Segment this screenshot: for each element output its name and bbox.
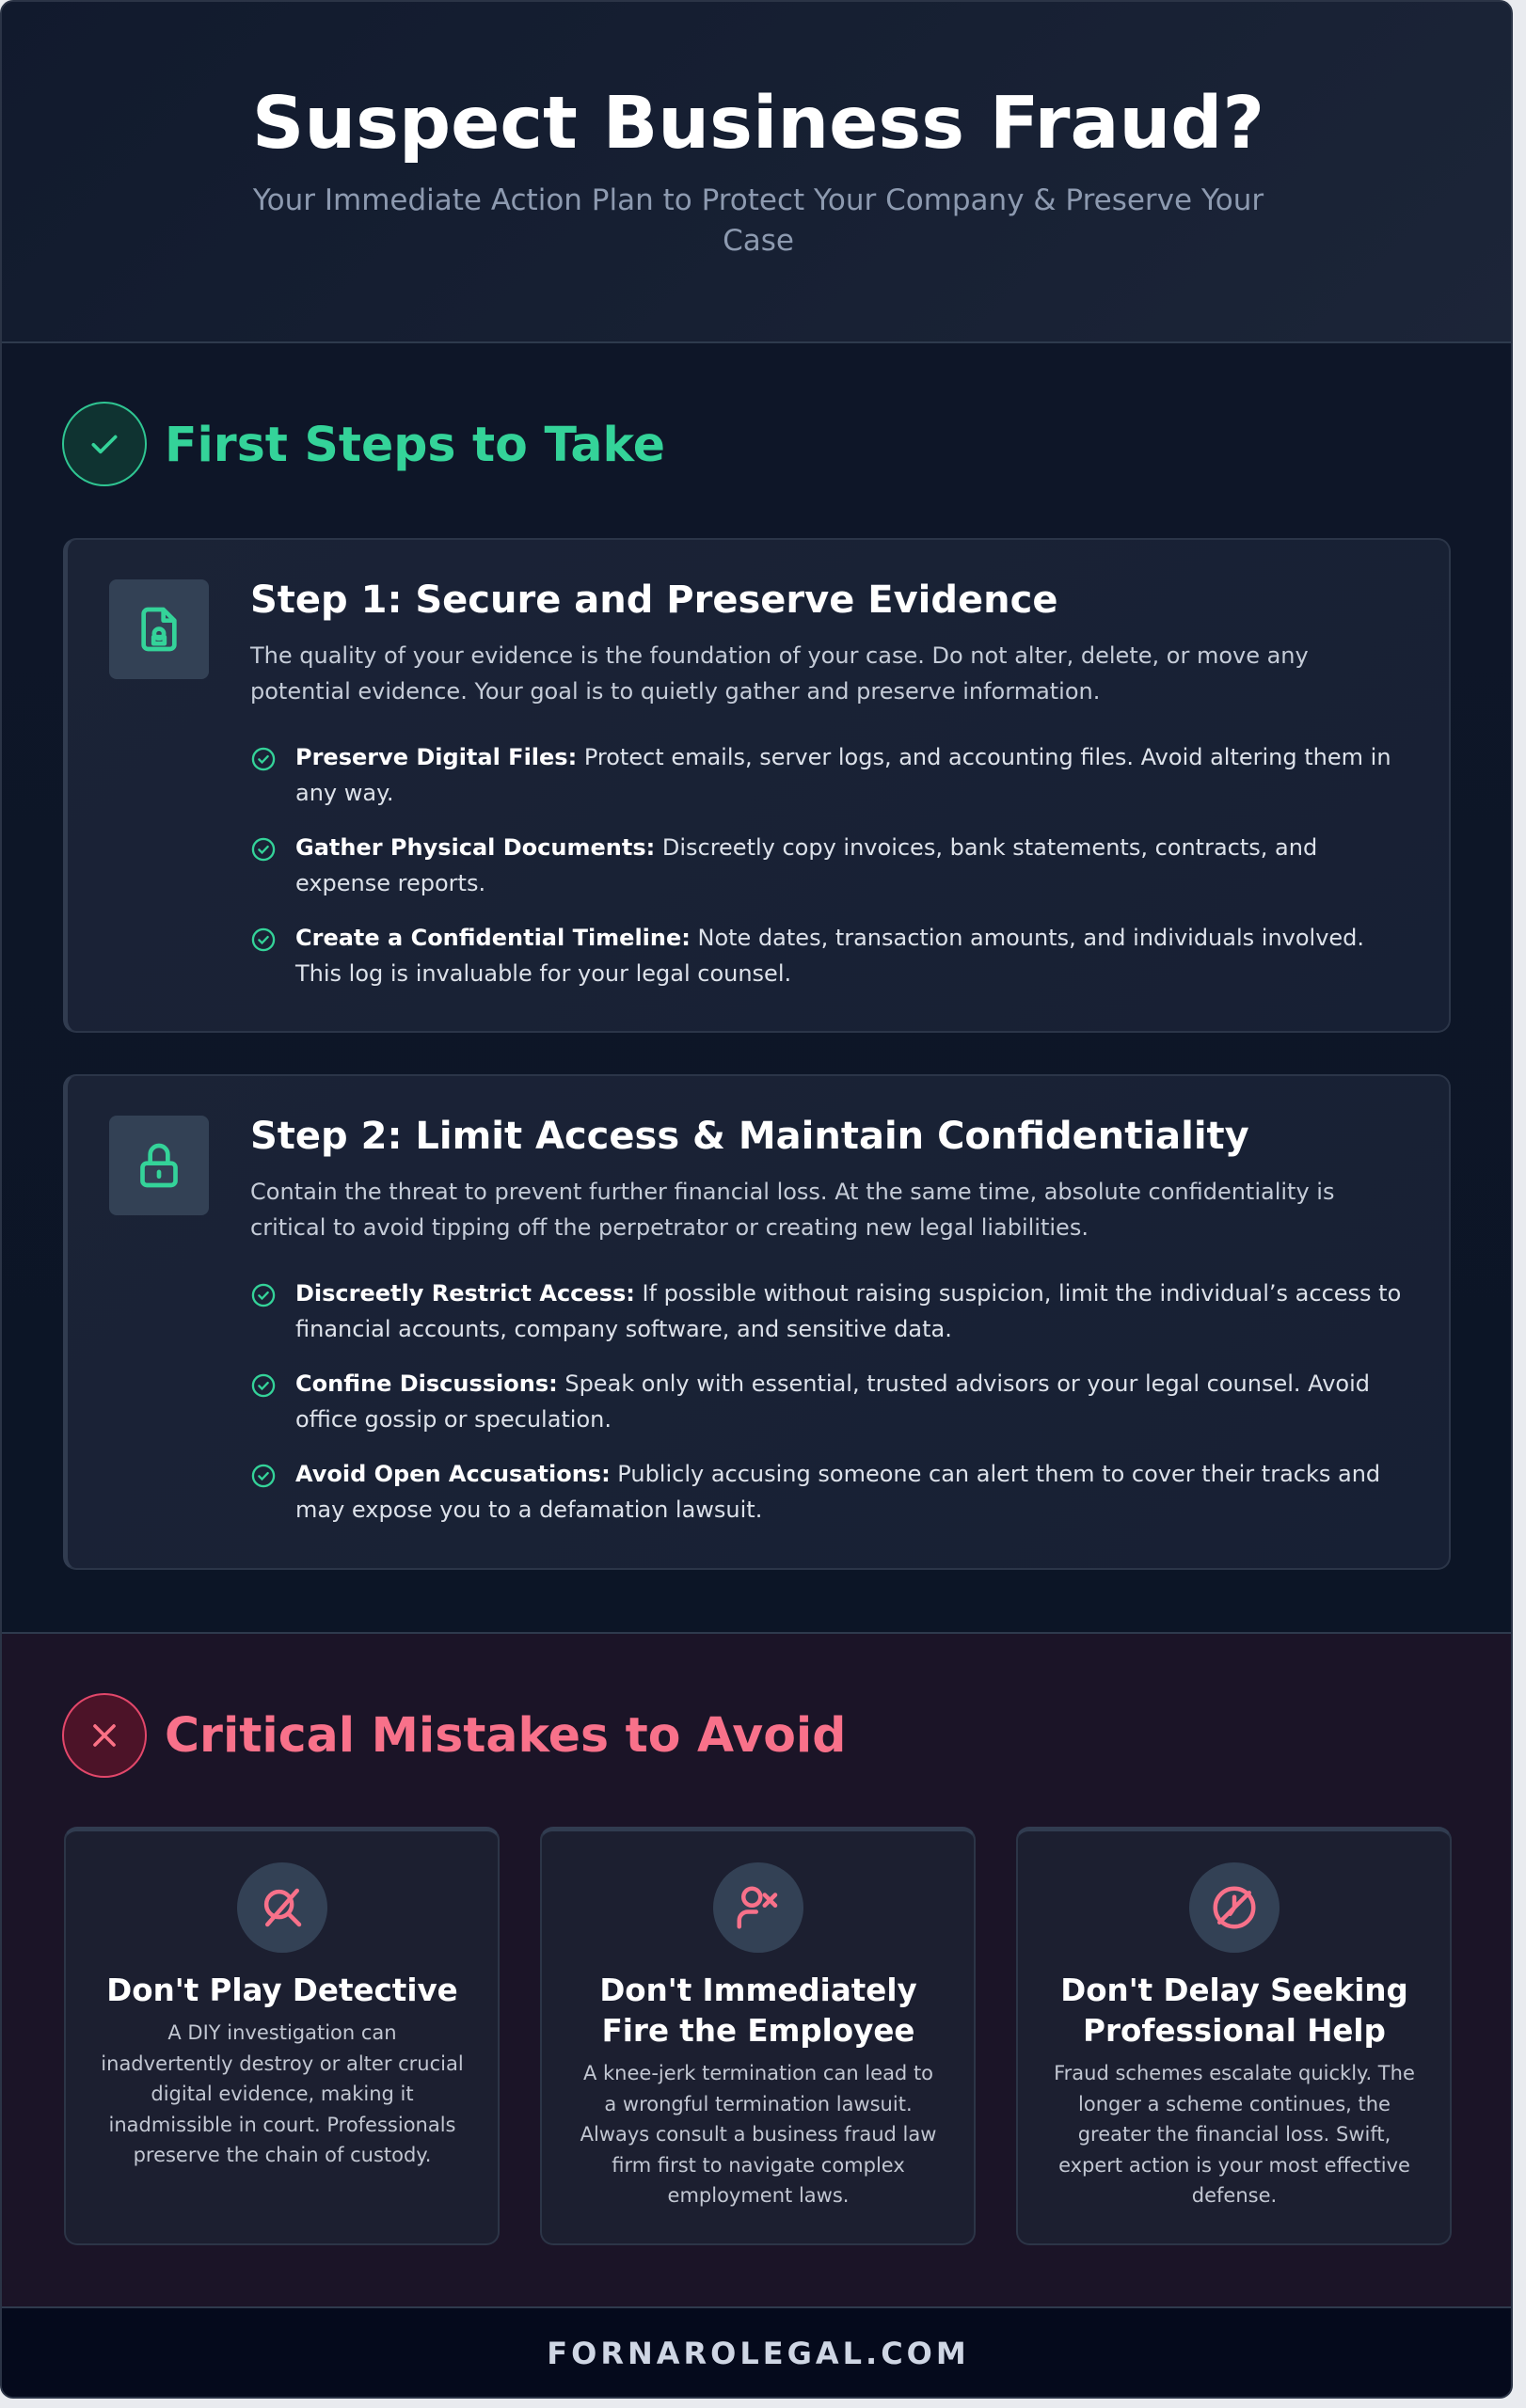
bullet: physical documents: expense reports.: [295, 870, 485, 896]
subtitle: Your Immediate Action Plan to Protect Your Company & Preserve Your Case: [253, 183, 1264, 258]
header: [2, 2, 1515, 343]
title: [599, 1972, 917, 2049]
bullet: physical documents: Gather Physical Documents: Discreetly copy invoices, bank statements, contracts, and: [295, 834, 1317, 861]
bullet: restrict access: Discreetly Restrict Access: If possible without raising suspicion, limit the individual’s access to: [295, 1280, 1401, 1307]
description: [580, 2062, 936, 2207]
description: Fraud schemes escalate quickly. The: [1054, 2062, 1415, 2084]
panel: step 2: [63, 1074, 1451, 1570]
description: inadvertently destroy or alter crucial: [101, 2052, 464, 2075]
panel: step 1: [63, 538, 1451, 1033]
title: [1060, 1972, 1408, 2049]
description: expert action is your most effective: [1058, 2154, 1410, 2177]
icon: crossed magnifier: [237, 1862, 327, 1953]
bullet: confine discussions: Confine Discussions: Speak only with essential, trusted advisors or your legal counsel. Avoid: [295, 1370, 1370, 1397]
description: A DIY investigation can: [167, 2021, 397, 2044]
footer: FORNAROLEGAL.COM: [547, 2336, 970, 2371]
description: [1054, 2062, 1415, 2207]
step 1 description: The quality of your evidence is the foundation of your case. Do not alter, delete, or move any: [250, 642, 1309, 669]
description: preserve the chain of custody.: [134, 2144, 431, 2166]
description: employment laws.: [668, 2184, 849, 2207]
step 2 title: Step 2: Limit Access & Maintain Confidentiality: [250, 1115, 1249, 1158]
title: Suspect Business Fraud?: [252, 82, 1264, 166]
bullet: digital files: Preserve Digital Files: Protect emails, server logs, and accounting files. Avoid altering them in: [295, 744, 1391, 770]
bullet: timeline: Create a Confidential Timeline: Note dates, transaction amounts, and individuals involved.: [295, 925, 1364, 951]
icon: lock: [109, 1116, 209, 1215]
icon: file lock: [109, 579, 209, 679]
step 1 description: potential evidence. Your goal is to quietly gather and preserve information.: [250, 678, 1100, 705]
bullet: avoid accusations: may expose you to a defamation lawsuit.: [295, 1497, 762, 1523]
title: Professional Help: [1083, 2013, 1386, 2049]
description: greater the financial loss. Swift,: [1078, 2123, 1391, 2146]
section: critical mistakes: [2, 1632, 1515, 2306]
heading: critical mistakes: Critical Mistakes to Avoid: [165, 1707, 846, 1763]
bullet: digital files: any way.: [295, 780, 393, 806]
bullet: avoid accusations: Avoid Open Accusations: Publicly accusing someone can alert them to cover their tracks and: [295, 1461, 1380, 1487]
bullet: physical documents: [252, 834, 1317, 896]
bullet: timeline: This log is invaluable for your legal counsel.: [295, 960, 791, 987]
description: a wrongful termination lawsuit.: [604, 2093, 913, 2115]
step 2 description: critical to avoid tipping off the perpetrator or creating new legal liabilities.: [250, 1214, 1089, 1241]
title: Fire the Employee: [602, 2013, 914, 2049]
description: inadmissible in court. Professionals: [109, 2114, 455, 2136]
heading: first steps: First Steps to Take: [165, 417, 665, 472]
description: digital evidence, making it: [151, 2083, 414, 2105]
description: Always consult a business fraud law: [580, 2123, 936, 2146]
card: don't play detective: [64, 1827, 500, 2245]
bullet: avoid accusations: [252, 1461, 1380, 1523]
bullet: confine discussions: office gossip or speculation.: [295, 1406, 612, 1433]
icon: check circle: [62, 402, 147, 486]
title: Don't Delay Seeking: [1060, 1972, 1408, 2008]
step 2 description: Contain the threat to prevent further financial loss. At the same time, absolute confidentiality is: [250, 1179, 1334, 1205]
icon: x circle: [62, 1693, 147, 1778]
bullet: confine discussions: [252, 1370, 1370, 1433]
bullet: digital files: [252, 744, 1391, 806]
icon: user x: [713, 1862, 803, 1953]
icon: crossed clock: [1189, 1862, 1280, 1953]
title: Don't Play Detective: [106, 1972, 458, 2008]
step 2 description: [250, 1179, 1334, 1241]
card: don't delay: [1016, 1827, 1452, 2245]
step 1 title: Step 1: Secure and Preserve Evidence: [250, 578, 1057, 622]
bullet: timeline: [252, 925, 1364, 987]
card: don't fire: [540, 1827, 976, 2245]
section: first steps: [2, 343, 1515, 1632]
title: Don't Immediately: [599, 1972, 917, 2008]
description: longer a scheme continues, the: [1078, 2093, 1391, 2115]
footer: [2, 2306, 1515, 2400]
step 1 description: [250, 642, 1309, 705]
bullet: restrict access: [252, 1280, 1401, 1342]
description: firm first to navigate complex: [612, 2154, 905, 2177]
description: defense.: [1192, 2184, 1277, 2207]
description: [101, 2021, 464, 2166]
bullet: restrict access: financial accounts, company software, and sensitive data.: [295, 1316, 952, 1342]
description: A knee-jerk termination can lead to: [583, 2062, 933, 2084]
